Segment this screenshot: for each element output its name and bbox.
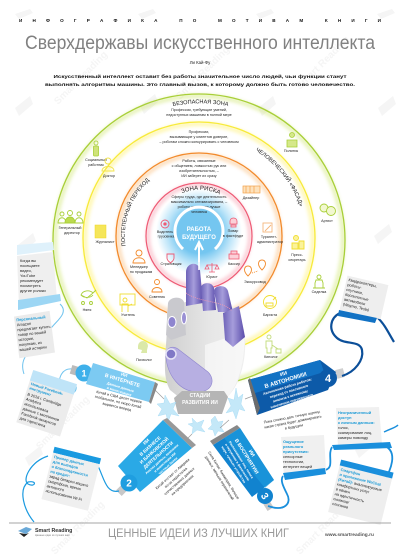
icon: journalist (95, 225, 106, 238)
tube 3: AI in perception: Распознавание лиц, голоса (228, 440, 254, 479)
note 5: drones: беспилотные (345, 292, 369, 302)
ring: human facade (83, 122, 315, 354)
note 6: personal data: голос, (338, 425, 349, 430)
caption tube 4 (263, 410, 323, 434)
tube 2: AI in business: И БАНКОВСКОЙ (138, 435, 170, 465)
label: Бариста (263, 313, 278, 317)
tube 3: AI in perception: и окружения в физическом (224, 443, 251, 482)
label: администратор (257, 240, 283, 244)
tube 2: AI in business: 2 (126, 478, 132, 490)
ring: gradual transition (116, 153, 282, 319)
icon: caregiver (313, 275, 325, 288)
label: секретарь (288, 258, 306, 262)
label: Водитель (157, 230, 173, 234)
core glow (156, 189, 242, 275)
text: transition: с общением, ловкостью рук или (172, 164, 226, 168)
icon: social worker (94, 141, 98, 156)
note 7: real presence: интернет вещей (283, 464, 312, 469)
note 8: smartphones: снимков/ (333, 496, 351, 505)
note 4: biometric data: Пример данных (54, 454, 86, 467)
note 3: Cambridge Analytica: данные с миллионов (22, 406, 60, 422)
note 2: shopping: Amazon (17, 321, 31, 327)
label: Советник (149, 295, 165, 299)
note 4: biometric data: активного (46, 483, 65, 492)
text: safe zone: недоступных машинам в полной мере (166, 113, 232, 117)
tube 2: AI in business: В БИЗНЕСЕ (139, 435, 162, 457)
label: Сиделка (312, 290, 327, 294)
label (257, 235, 283, 244)
center: work of the future: РАБОТА (187, 227, 212, 233)
note 6: personal data: к личным данным: (338, 420, 375, 425)
tube 4: autonomous AI: ИИ (279, 370, 288, 378)
pedestal: development stages: СТАДИИ (190, 393, 211, 399)
label (59, 226, 81, 235)
icon: advisor (152, 280, 162, 292)
note 8: smartphones: на идентичность (334, 491, 365, 503)
text: safe zone: Профессии, требующие умений, (171, 108, 227, 112)
tube 2: AI in business: Анализ данных, компании (145, 443, 179, 475)
note 7: real presence: сенсорные (283, 454, 303, 459)
watermark pattern: Smart Reading (294, 499, 352, 557)
header kicker: И Н Ф О Г Р А Ф И К А П О М О Т И В А М К Н И Г И (19, 18, 381, 23)
tube 2: AI in business: ДЕЯТЕЛЬНОСТИ (142, 440, 174, 470)
center: work of the future: БУДУЩЕГО (182, 235, 216, 241)
label (85, 158, 107, 167)
tube 3: AI in perception: 3 (258, 491, 271, 502)
tube 4: autonomous AI: 4 (325, 373, 332, 385)
note 8: smartphones: слоганов (332, 501, 349, 510)
note 7: real presence: технологии, (283, 459, 304, 464)
icon: doctor (102, 158, 114, 171)
note 5: drones: Квадрокоптеры, (348, 277, 377, 288)
note 7: real presence: присутствия: (283, 449, 309, 454)
note 7 band (283, 468, 326, 480)
gray finger (166, 298, 186, 340)
caption tube 1: глобальное, но скоро Китай (94, 395, 142, 409)
note 1: video recommendations: другие ролики (20, 288, 46, 293)
logo: Smart Reading: Ценные идеи из лучших книг (35, 533, 70, 537)
text: facade: вызывающие у клиентов доверие, (170, 135, 228, 139)
label: Кинолог (264, 355, 279, 359)
tube 1: AI on the internet: и монетизация (106, 386, 132, 397)
note 8: smartphones: (Китай): анализируемые (338, 477, 383, 492)
tube 1: AI on the internet: ИИ (120, 371, 128, 378)
tube 3: AI in perception: ИИ (247, 449, 256, 458)
note 1: video recommendations: рекомендует (20, 278, 43, 283)
caption tube 4: Пока сложно дать точную оценку, (263, 410, 321, 425)
note 5: drones: спутники, (346, 287, 364, 296)
slogan: ЦЕННЫЕ ИДЕИ ИЗ ЛУЧШИХ КНИГ (108, 528, 290, 540)
title: Сверхдержавы искусственного интеллекта (25, 33, 375, 54)
text: transition: Работы, связанные (182, 159, 216, 163)
label: Социальный (85, 158, 107, 162)
label: Турагент- (261, 235, 278, 239)
note 2: shopping: Персональный (16, 314, 46, 322)
note 5: drones: роботы- (347, 282, 363, 290)
label: Повар (228, 229, 238, 233)
icon: insurer (167, 254, 174, 263)
icon: lawyer scales (205, 263, 219, 272)
caption tube 4: в будущем (285, 423, 304, 431)
illustration: robot hand (165, 264, 245, 398)
note 7: real presence: реального (283, 444, 304, 449)
footer rule (9, 522, 391, 524)
ribbon: light blue notes 1-3 (23, 304, 76, 394)
palm (165, 300, 245, 398)
text: risk: Сферы труда, где деятельность (172, 195, 227, 199)
tube 4: autonomous AI (248, 360, 345, 415)
ribbon: blue lower right (268, 425, 398, 508)
note 4: biometric data: на кредит: (50, 469, 71, 478)
note 2: shopping: вашей истории (19, 344, 47, 352)
note 1: video recommendations: посмотреть (20, 283, 41, 288)
label: Дизайнер (243, 196, 259, 200)
label: Генеральный (59, 226, 81, 230)
note 3: Cambridge Analytica: Facebook-аккаунтов (21, 411, 57, 426)
caption tube 2: из-за недостатка (164, 466, 189, 489)
note 8: smartphones (328, 460, 394, 525)
tube 4: autonomous AI: В АВТОНОМИИ (264, 372, 308, 390)
note 4: biometric data: заряд батареи вашего (49, 473, 89, 488)
label (288, 253, 306, 262)
caption tube 4: какая страна будет доминировать (264, 414, 322, 430)
tube 2: AI in business: ИИ (142, 438, 150, 446)
label: Журналист (95, 240, 115, 244)
ring finger (214, 286, 233, 312)
caption tube 3: Сила Китая: биометрия, больше (207, 451, 240, 500)
tube 4: autonomous AI: мира (289, 403, 298, 409)
watermark pattern: Smart Reading (174, 44, 232, 102)
label: Политик (284, 149, 298, 153)
label: Юрист (206, 275, 218, 279)
thumb ball (166, 347, 212, 392)
little finger (223, 306, 245, 347)
note 3: Cambridge Analytica: В 2016 г. Cambridge (27, 392, 62, 407)
note 5: drones: автомобили (344, 297, 366, 306)
label: Страховщик (161, 262, 182, 266)
label (223, 229, 243, 238)
note 3: Cambridge Analytica: Новый Facebook- (30, 381, 65, 396)
note 6: personal data (336, 407, 382, 448)
fingers (186, 264, 245, 347)
note 3: Cambridge Analytica: использовала (24, 401, 50, 414)
caption tube 3: данных, меньше ограничений (204, 455, 235, 501)
label: Артист (321, 219, 333, 223)
heading: gradual transition: ПОСТЕПЕННЫЙ ПЕРЕХОД (121, 178, 150, 246)
label (157, 230, 175, 238)
note 4: biometric data (41, 447, 101, 511)
icon: psychologist (138, 341, 148, 353)
label: Кассир (228, 262, 240, 266)
text: transition: изобретательностью, – (179, 169, 220, 173)
text: risk: человека (191, 210, 208, 214)
label: в фастфуде (223, 234, 243, 238)
tube 3: AI in perception: В ВОСПРИЯТИИ (233, 438, 260, 476)
note 8: smartphones: и приложение WeChat (339, 472, 382, 487)
label: Экскурсовод (244, 280, 267, 284)
lightning splash (157, 388, 245, 436)
note 6: personal data: доступ (338, 415, 352, 420)
tube 3: AI in perception (210, 425, 274, 511)
caption tube 2: Китай отстает от Америки (155, 458, 190, 490)
caption tube 2 (155, 458, 200, 502)
pink glow line (186, 293, 232, 311)
icon: press secretary (292, 236, 304, 249)
icon: truck driver (161, 220, 169, 228)
ribbon: left lower (23, 456, 119, 522)
caption tube 1 (93, 390, 143, 414)
note 1: video recommendations: Когда вы (20, 258, 36, 263)
tube 4: autonomous AI: переход от пассивного (269, 384, 309, 399)
watermark pattern: Smart Reading (294, 34, 352, 92)
tube 1: AI on the internet: Данные данные (106, 381, 134, 393)
icon: tour guide (245, 260, 265, 276)
caption tube 1: Китай и США делят первое (96, 390, 142, 404)
text: transition (172, 159, 226, 178)
index finger (186, 264, 203, 306)
label (130, 265, 153, 274)
arrow of light up to the core (198, 243, 200, 270)
label: Учитель (121, 313, 135, 317)
label: Доктор (103, 174, 115, 178)
text: risk: роботы справятся лучше (178, 205, 220, 209)
label: Пресс- (291, 253, 304, 257)
note 2: shopping: истории, (18, 336, 34, 342)
note 2: shopping: предлагает купить (17, 324, 51, 332)
note 4: biometric data: для выводов (52, 459, 79, 470)
icon: CEO (58, 210, 83, 223)
note 6: personal data: Неограниченный (338, 410, 372, 415)
note 2: shopping: товар по вашей (18, 329, 46, 337)
logo: Smart Reading: Smart Reading (35, 528, 72, 534)
tube 2: AI in business: и инвестиции ИИ (153, 451, 177, 473)
note 5: drones (340, 276, 388, 319)
heading: human facade: ЧЕЛОВЕЧЕСКИЙ «ФАСАД» (256, 148, 302, 206)
note 3: Cambridge Analytica: для таргетинга (19, 415, 47, 429)
note 6: personal data: сканирование лиц, (338, 430, 372, 435)
pedestal: development stages: РАЗВИТИЯ ИИ (182, 400, 218, 406)
icon: cashier (229, 251, 239, 259)
note 3: Cambridge Analytica (16, 370, 77, 437)
label: по продажам (130, 270, 153, 274)
intro text: выполнять алгоритмы машины. Это главный вызов, к которому должно быть готово человечество. (45, 81, 356, 88)
icon: administrator (263, 223, 272, 232)
tube 2: AI in business: частные банки (158, 456, 178, 475)
icon: dog walker (266, 335, 281, 353)
tube 4: autonomous AI: изменению окружающего (270, 393, 314, 409)
center: work of the future (175, 207, 223, 262)
note 4: biometric data: о благонадежности (51, 464, 89, 478)
caption tube 2: отечественных данных (163, 467, 195, 496)
icon: nanny (81, 290, 96, 304)
middle finger (201, 283, 216, 311)
text: transition: ИИ заберет их сразу (181, 174, 217, 178)
label: Психолог (136, 358, 153, 362)
note 1: video recommendations: YouTube (20, 273, 35, 278)
tube 3: AI in perception: мире, «умные» устройства (220, 445, 247, 484)
note 3: Cambridge Analytica: инструмент (29, 385, 52, 397)
ring: safe zone (53, 94, 345, 386)
note 5 band (338, 310, 377, 323)
text: facade: – роботам сложно конкурировать с человеком (159, 140, 239, 144)
icon: fast food cook (230, 218, 237, 227)
label: грузовика (158, 234, 175, 238)
icon: barista (264, 296, 276, 308)
logo: Smart Reading (18, 527, 72, 537)
watermark pattern: Smart Reading (49, 499, 107, 557)
note 4: biometric data: использования Wi-Fi (45, 488, 83, 502)
icon: teacher (120, 294, 135, 312)
pedestal: development stages (174, 391, 228, 414)
tube 4: autonomous AI: анализа к активному (273, 389, 308, 403)
note 1: video recommendations: видео, (20, 268, 32, 273)
note 7: real presence: Ощущение (283, 439, 305, 444)
note 3: Cambridge Analytica: Analytica (25, 396, 43, 406)
note 8: smartphones: Смартфон (340, 467, 362, 477)
icon: manager (133, 250, 145, 263)
author: Ли Кай-Фу (190, 60, 211, 65)
label: работник (88, 163, 104, 167)
label: Няня (83, 308, 91, 312)
intro text (45, 73, 356, 88)
ribbon: dark blue on the right (331, 313, 394, 376)
icon: artist (320, 204, 336, 216)
text: safe zone (166, 108, 232, 117)
note 1: video recommendations: посещаете (20, 263, 40, 268)
tube 1: AI on the internet (70, 363, 158, 404)
caption tube 1: вырвется вперед (102, 402, 132, 412)
text: facade (159, 130, 239, 144)
heading: safe zone: БЕЗОПАСНАЯ ЗОНА (172, 99, 228, 106)
note 6: personal data: камеры повсюду (338, 435, 368, 440)
panel: zone rings (53, 94, 345, 386)
watermark pattern: Smart Reading (34, 394, 92, 452)
note 5: drones: (Waymo, Tesla) (342, 301, 370, 312)
tube 2: AI in business (116, 418, 196, 496)
icon: politician (287, 132, 297, 147)
label: Менеджер (130, 265, 148, 269)
note 4: biometric data: смартфона, время (48, 478, 81, 491)
note 8: smartphones: комфортных услуг (337, 481, 371, 494)
intro text: Искусственный интеллект оставит без работы значительное число людей, чьи функции станут (54, 73, 347, 80)
note 2: shopping (14, 311, 55, 358)
ring: risk zone (146, 183, 252, 289)
tube 1: AI on the internet: 1 (81, 368, 87, 378)
caption tube 2: на предприятиях (171, 474, 195, 496)
label: директор (64, 231, 80, 235)
note 2: shopping: покупкам, из (19, 340, 42, 347)
note 8: smartphones: в обмен (335, 486, 351, 495)
connector wires (155, 390, 258, 440)
text: risk (171, 195, 228, 214)
note 1: video recommendations (17, 242, 61, 310)
tube 1: AI on the internet: В ИНТЕРНЕТЕ (104, 373, 141, 389)
icon: designer (243, 186, 260, 193)
note 6 band (332, 442, 392, 450)
website: www.smartreading.ru (324, 532, 374, 538)
heading: risk zone: ЗОНА РИСКА (181, 186, 220, 194)
tube 4: autonomous AI: Автономная работа роботов: (263, 377, 312, 396)
watermark pattern: Smart Reading (52, 49, 110, 107)
note 7: real presence (281, 435, 326, 476)
text: facade: Профессии, (189, 130, 209, 134)
text: risk: максимально оптимизирована, – (171, 200, 228, 204)
